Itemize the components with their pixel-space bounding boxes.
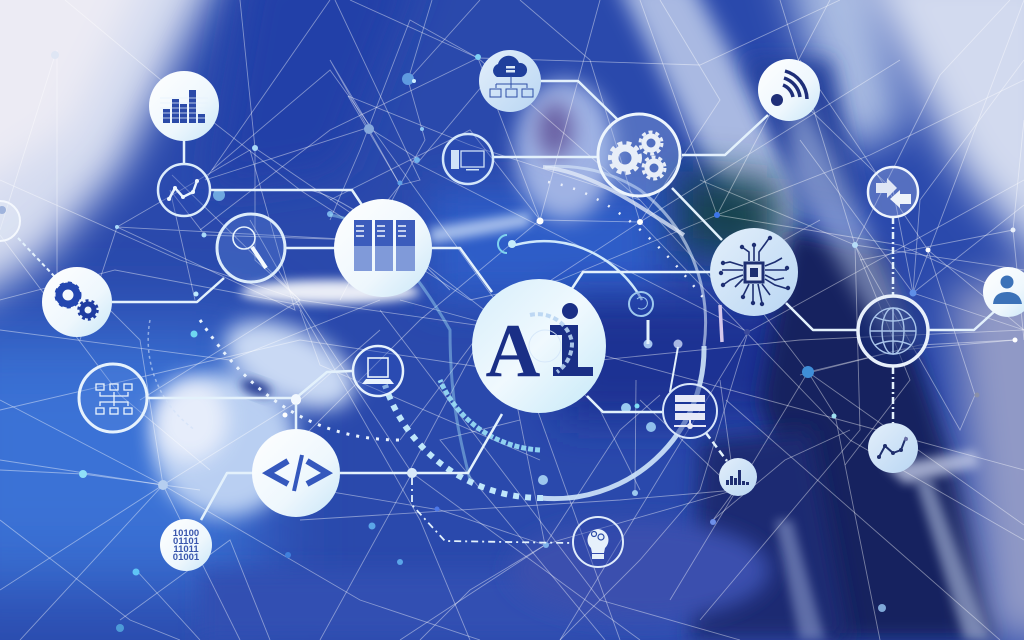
connectors between nodes [18,81,996,543]
icon: binary digits bubble: 01101 [173,536,200,547]
icon: cloud network bubble [479,50,541,112]
icon: exchange arrows ring [868,167,918,217]
icon: code brackets bubble [252,429,340,517]
icon: small dial ring [629,292,653,316]
icon: desktop monitor ring [443,134,493,184]
icon: laptop ring [353,346,403,396]
icon: globe ring [858,296,928,366]
central Ai bubble: A [486,309,541,393]
arcs and dashed rings around the Ai hub [148,166,722,499]
icon: network diagram ring [79,364,147,432]
icon: three gears ring [598,114,680,196]
icon: small arc marker [498,235,516,253]
icon: bar chart bubble [149,71,219,141]
icon: light bulb ring [573,517,623,567]
icon: twin gears bubble [42,267,112,337]
icon: binary digits bubble: 10100 [173,528,199,539]
icon: binary digits bubble: 01001 [173,552,200,563]
icon: partial cloud ring at left edge [0,201,20,241]
central Ai bubble [472,279,606,413]
icon: server stack ring [663,384,717,438]
icon: person bubble [983,267,1024,317]
icon: wifi bubble [758,59,820,121]
icon: microchip bubble [710,228,798,316]
icon: magnifier ring [217,214,285,282]
icon: server columns bubble [334,199,432,297]
icon: line chart ring [158,164,210,216]
icon: binary digits bubble [160,519,212,571]
icon: small line chart bubble [868,423,918,473]
icon: binary digits bubble: 11011 [173,544,199,555]
icon: small bar chart bubble [719,458,757,496]
